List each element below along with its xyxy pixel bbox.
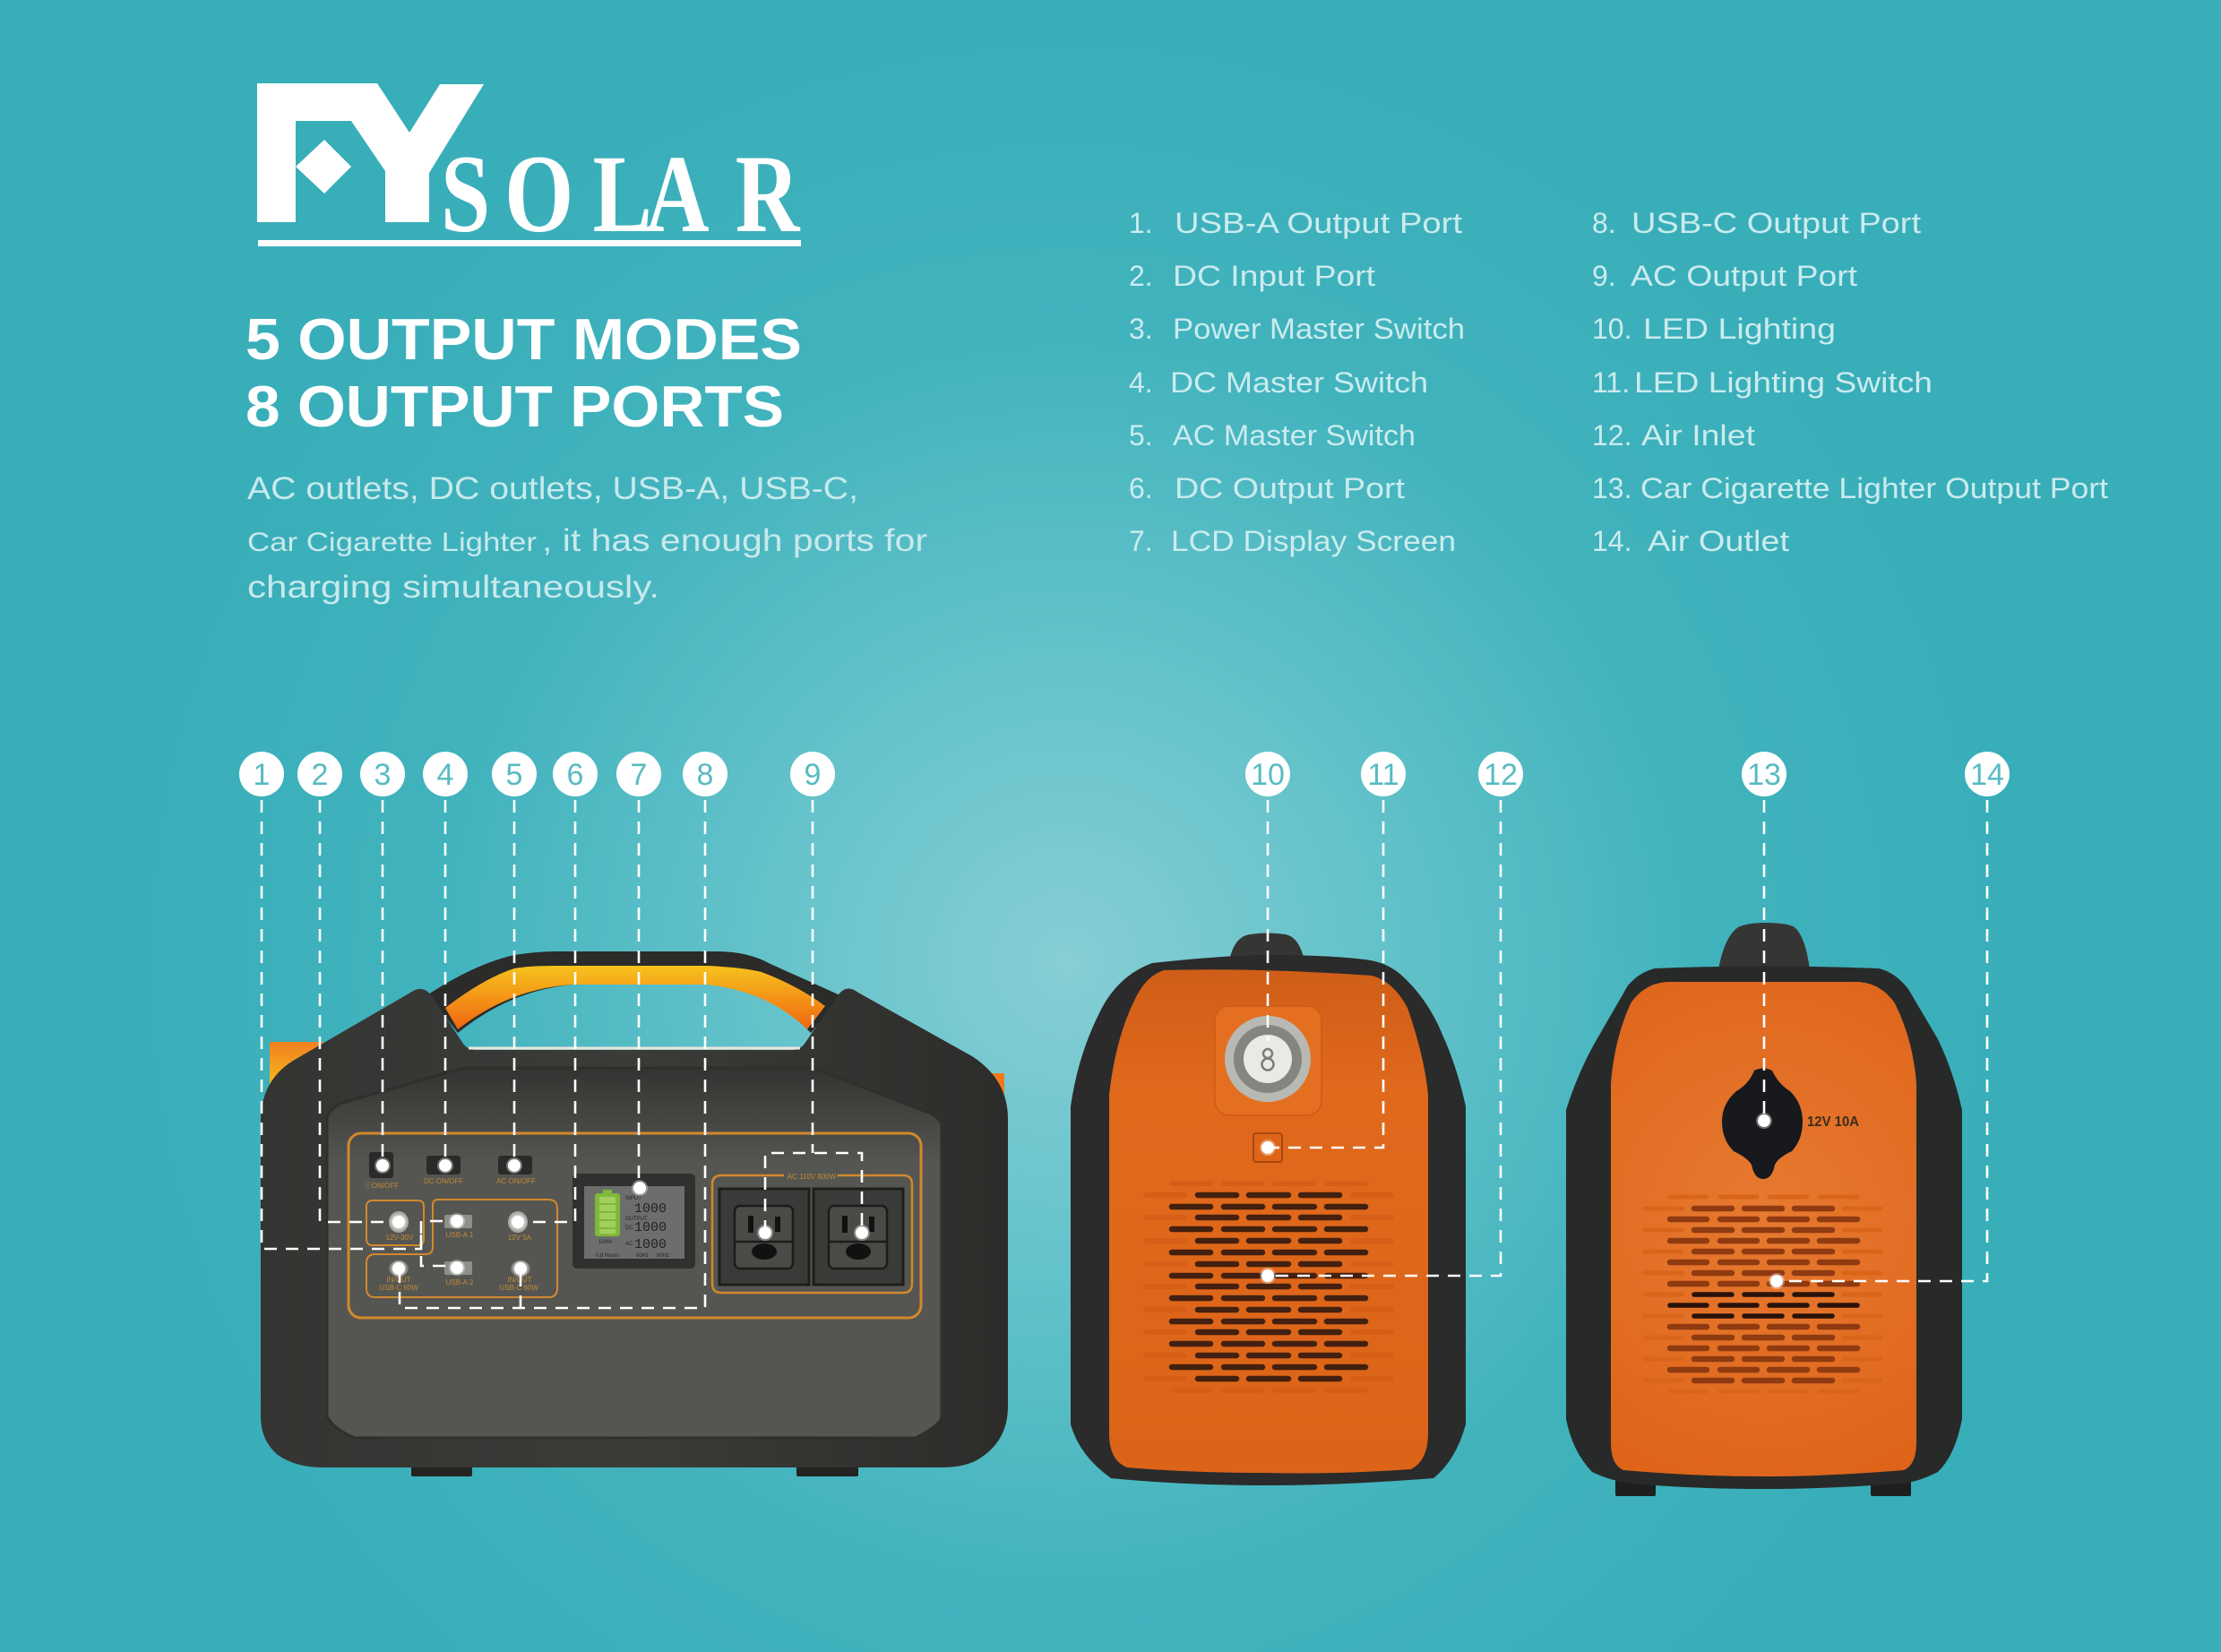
heading: 8 OUTPUT PORTS <box>245 374 784 439</box>
parts list: right column: 8. <box>1592 207 1616 239</box>
LCD display: AC <box>625 1242 633 1247</box>
handle <box>428 951 842 1033</box>
parts list: left column: 4. <box>1129 366 1153 399</box>
power station: side view with lock and vents <box>1071 934 1466 1485</box>
LCD display: 0.8 Hours <box>596 1253 619 1259</box>
parts list: left column: 1. <box>1129 207 1153 239</box>
parts list: left column: AC Master Switch <box>1173 419 1416 452</box>
callout 12 <box>1261 752 1523 1282</box>
faint vent outlines <box>1645 1197 1881 1391</box>
rear orange pieces <box>270 1042 1004 1095</box>
LCD display: INPUT <box>625 1196 641 1201</box>
callout 6 <box>512 752 598 1228</box>
parts list: right column: Car Cigarette Lighter Output Port <box>1640 472 2108 504</box>
DC ports block: USB-C 60W <box>499 1284 538 1292</box>
callout 10 <box>1245 752 1290 1041</box>
faint vent outlines <box>1146 1183 1391 1390</box>
callout 3 <box>360 752 405 1172</box>
callout 8 <box>392 752 727 1308</box>
callout 1 <box>239 752 463 1274</box>
callout 9 <box>759 752 868 1239</box>
callout 4 <box>423 752 468 1172</box>
heading <box>245 306 802 439</box>
vent slots <box>1172 1195 1365 1379</box>
description text: Car Cigarette Lighter <box>247 528 537 557</box>
LCD display: 1000 <box>634 1237 667 1252</box>
callout 9: 9 <box>805 758 821 792</box>
DC ports block: 12V 5A <box>508 1234 532 1242</box>
parts list: left column: DC Master Switch <box>1170 366 1428 399</box>
parts list: right column: USB-C Output Port <box>1631 207 1921 239</box>
switches: DC ON/OFF <box>424 1177 463 1185</box>
car socket <box>1722 1068 1803 1179</box>
callout 4: 4 <box>437 758 453 792</box>
parts list: right column: 10. <box>1592 313 1631 345</box>
socket label: 12V 10A <box>1807 1114 1859 1130</box>
description text: charging simultaneously. <box>247 570 659 605</box>
DC ports block: USB-A 1 <box>446 1231 474 1239</box>
parts list: left column: DC Input Port <box>1173 260 1375 292</box>
callout 5 <box>492 752 537 1172</box>
feet <box>411 1464 858 1476</box>
parts list: right column: AC Output Port <box>1631 260 1857 292</box>
callout 11 <box>1261 752 1406 1154</box>
LED lamp <box>1215 1006 1321 1115</box>
callout 14 <box>1770 752 2010 1287</box>
switches <box>365 1152 536 1190</box>
LCD display: 1000 <box>634 1220 667 1235</box>
DC ports block: USB-A 2 <box>446 1278 474 1286</box>
parts list: left column: USB-A Output Port <box>1175 207 1462 239</box>
callout 7 <box>616 752 661 1194</box>
DC ports block: USB-C 60W <box>379 1284 418 1292</box>
DC ports block: IN/OUT <box>386 1276 411 1284</box>
AC outlets: AC 110V 800W <box>788 1173 837 1181</box>
power station: side view with car socket and vents <box>1566 923 1962 1496</box>
parts list: left column: 6. <box>1129 472 1153 504</box>
parts list: right column: 13. <box>1592 472 1631 504</box>
outlet 2 <box>814 1189 903 1285</box>
LCD display: 60Hz <box>636 1253 649 1259</box>
callout 2 <box>297 752 405 1228</box>
AC outlets <box>712 1173 912 1293</box>
LED switch <box>1253 1133 1282 1162</box>
parts list: right column: 9. <box>1592 260 1616 292</box>
power station: front view <box>261 951 1008 1476</box>
callout 14: 14 <box>1970 758 2004 792</box>
callout 6: 6 <box>567 758 583 792</box>
callout 11: 11 <box>1367 758 1399 792</box>
parts list: right column: LED Lighting Switch <box>1634 366 1933 399</box>
description text <box>247 471 927 605</box>
callout 13 <box>1742 752 1786 1127</box>
logo: FY Solar <box>257 83 801 256</box>
callout 7: 7 <box>631 758 647 792</box>
callout 3: 3 <box>374 758 391 792</box>
control panel outline <box>349 1133 921 1318</box>
callout 13: 13 <box>1747 758 1781 792</box>
DC ports block: 12V-30V <box>386 1234 414 1242</box>
parts list: right column: LED Lighting <box>1643 313 1836 345</box>
heading: 5 OUTPUT MODES <box>245 306 802 372</box>
parts list: left column: 2. <box>1129 260 1153 292</box>
vent slots <box>1670 1209 1857 1381</box>
parts list: left column: DC Output Port <box>1175 472 1405 504</box>
parts list: right column <box>1592 207 2108 557</box>
LCD display: 100% <box>598 1240 613 1245</box>
parts list: left column: 7. <box>1129 525 1153 557</box>
parts list: left column: LCD Display Screen <box>1171 525 1456 557</box>
feet <box>1615 1480 1911 1496</box>
callout 10: 10 <box>1251 758 1285 792</box>
parts list: left column: 3. <box>1129 313 1153 345</box>
LCD display: DC <box>625 1226 633 1231</box>
callout 12: 12 <box>1484 758 1518 792</box>
parts list: right column: 11. <box>1592 366 1630 399</box>
DC ports block <box>366 1200 557 1297</box>
body shell <box>261 988 1008 1467</box>
DC ports block: IN/OUT <box>507 1276 532 1284</box>
parts list: left column <box>1129 207 1465 557</box>
LCD display: 1000 <box>634 1201 667 1217</box>
switches: ⓘON/OFF <box>365 1182 399 1190</box>
parts list: right column: Air Outlet <box>1648 525 1789 557</box>
logo: FY Solar: SOLAR <box>441 133 801 256</box>
LCD display: 60Hz <box>657 1253 669 1259</box>
parts list: right column: 14. <box>1592 525 1631 557</box>
callout 2: 2 <box>312 758 328 792</box>
front face <box>327 1068 942 1438</box>
description text: , it has enough ports for <box>542 523 927 558</box>
description text: AC outlets, DC outlets, USB-A, USB-C, <box>247 471 858 506</box>
parts list: left column: 5. <box>1129 419 1153 452</box>
parts list: right column: 12. <box>1592 419 1631 452</box>
callout 5: 5 <box>506 758 522 792</box>
switches: AC ON/OFF <box>496 1177 536 1185</box>
LCD display: OUTPUT <box>625 1217 648 1222</box>
parts list: right column: Air Inlet <box>1641 419 1755 452</box>
callout 8: 8 <box>697 758 713 792</box>
callout 1: 1 <box>254 758 270 792</box>
outlet 1 <box>719 1189 809 1285</box>
LCD display <box>572 1174 695 1269</box>
parts list: left column: Power Master Switch <box>1173 313 1465 345</box>
